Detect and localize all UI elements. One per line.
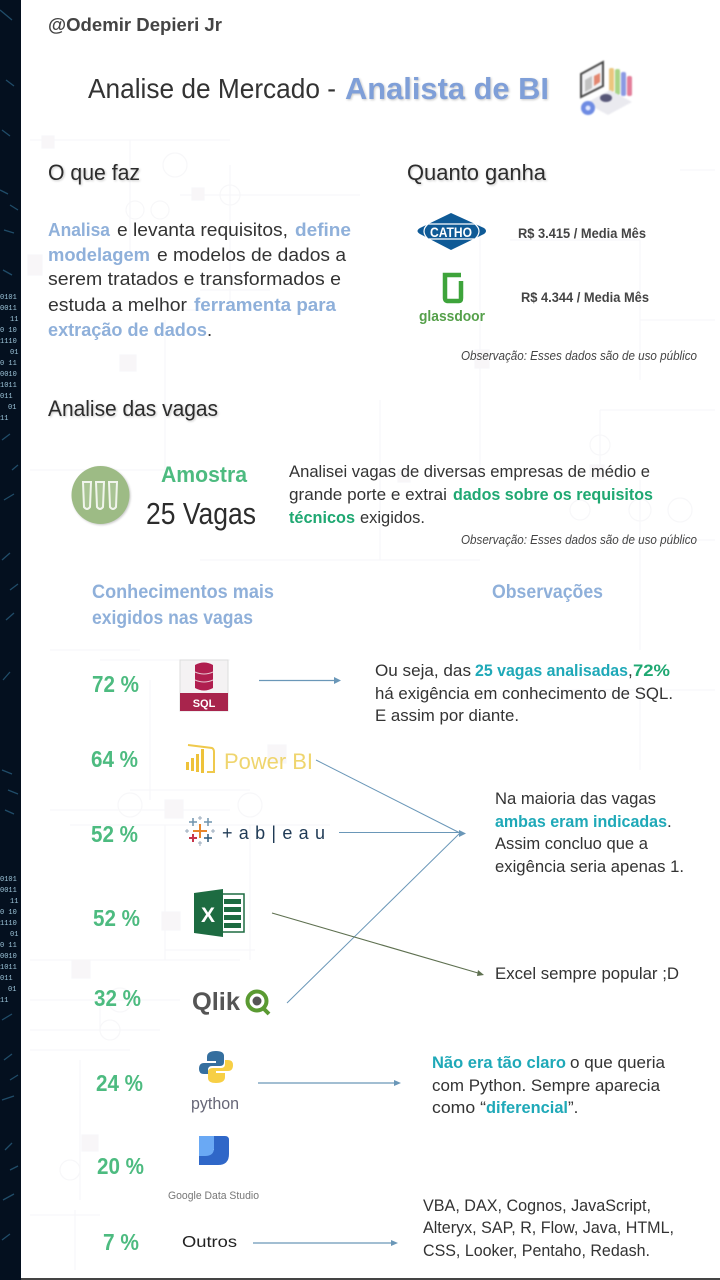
note: BI tools: ambas eram indicadas bbox=[495, 812, 667, 831]
dark side strip: 0 11 bbox=[0, 360, 17, 368]
logo: Tableau: + a b | e a u bbox=[222, 823, 325, 843]
sample description: Analisei vagas de diversas empresas de médio e bbox=[289, 462, 650, 481]
logo: Excel: X bbox=[201, 904, 215, 927]
description text: extração de dados bbox=[48, 319, 207, 340]
heading: Observações: Observações bbox=[492, 582, 603, 603]
dark side strip: 11 bbox=[10, 898, 18, 906]
percent Data Studio: 20 % bbox=[97, 1153, 144, 1179]
dark side strip: 0101 bbox=[0, 876, 17, 884]
note: Excel: Excel sempre popular ;D bbox=[495, 964, 679, 983]
note: Python: ”. bbox=[568, 1098, 578, 1117]
note: SQL: E assim por diante. bbox=[375, 706, 519, 725]
sample description: técnicos bbox=[289, 508, 355, 527]
logo: Excel bbox=[194, 889, 244, 937]
salary: Glassdoor: R$ 4.344 / Media Mês bbox=[521, 290, 649, 305]
note: public data: Observação: Esses dados são de uso público bbox=[461, 533, 697, 547]
arrow: SQL bbox=[259, 677, 341, 684]
heading: most required skills bbox=[92, 582, 274, 629]
icon: SQL: SQL bbox=[193, 698, 216, 710]
logo: Python bbox=[191, 1051, 239, 1113]
title: Analise de Mercado - bbox=[88, 73, 336, 104]
arrow: Outros bbox=[253, 1240, 398, 1246]
logo: Power BI: Power BI bbox=[224, 749, 313, 774]
logo: Glassdoor bbox=[419, 275, 485, 325]
logo: Catho bbox=[418, 213, 486, 250]
arrow: Python bbox=[258, 1080, 401, 1086]
note: Python: como “ bbox=[432, 1098, 486, 1117]
logo: Qlik: Qlik bbox=[192, 988, 240, 1016]
description text: modelagem bbox=[48, 244, 150, 265]
logo: Catho: CATHO bbox=[430, 224, 472, 240]
heading: Analise das vagas: Analise das vagas bbox=[48, 396, 218, 421]
note: Python: Não era tão claro bbox=[432, 1053, 566, 1072]
title: Analista de BI bbox=[345, 71, 549, 106]
description text: Analisa bbox=[48, 219, 111, 240]
sample description: grande porte e extrai bbox=[289, 485, 447, 504]
dark side strip: 1011 bbox=[0, 382, 17, 390]
dark side strip: 0010 bbox=[0, 371, 17, 379]
note: SQL bbox=[375, 661, 673, 725]
dark side strip: 1011 bbox=[0, 964, 17, 972]
percent SQL: 72 % bbox=[92, 671, 139, 697]
description text: define bbox=[295, 219, 351, 240]
note: other tools: CSS, Looker, Pentaho, Redash. bbox=[423, 1241, 650, 1260]
note: Python: o que queria bbox=[570, 1053, 666, 1072]
arrows: BI tools converge bbox=[287, 760, 466, 1003]
title bbox=[88, 71, 549, 106]
icon: analytics illustration bbox=[581, 62, 632, 115]
dark side strip: 0101 bbox=[0, 294, 17, 302]
dark side strip: 1110 bbox=[0, 338, 17, 346]
dark side strip: 11 bbox=[0, 997, 8, 1005]
note: BI tools bbox=[495, 789, 684, 876]
icon: SQL bbox=[180, 660, 228, 711]
dark side strip: 0011 bbox=[0, 305, 17, 313]
percent Power BI: 64 % bbox=[91, 746, 138, 772]
dark side strip: 01 bbox=[8, 404, 16, 412]
percent Outros: 7 % bbox=[103, 1229, 139, 1255]
note: BI tools: exigência seria apenas 1. bbox=[495, 857, 684, 876]
note: other tools: Alteryx, SAP, R, Flow, Java, HTML, bbox=[423, 1218, 674, 1237]
heading: most required skills: Conhecimentos mais bbox=[92, 582, 274, 603]
note: public data: Observação: Esses dados são de uso público bbox=[461, 349, 697, 363]
label: Amostra: Amostra bbox=[161, 462, 248, 487]
salary: Catho: R$ 3.415 / Media Mês bbox=[518, 226, 646, 241]
author handle: @Odemir Depieri Jr bbox=[48, 14, 222, 35]
percent Python: 24 % bbox=[96, 1070, 143, 1096]
logo: Power BI bbox=[186, 745, 313, 774]
dark side strip: 011 bbox=[0, 393, 13, 401]
dark side strip: 0 11 bbox=[0, 942, 17, 950]
sample size: 25 Vagas bbox=[146, 496, 256, 531]
description text: e levanta requisitos, bbox=[117, 219, 288, 240]
note: other tools: VBA, DAX, Cognos, JavaScript, bbox=[423, 1196, 651, 1215]
logo: Tableau bbox=[185, 816, 325, 846]
description text bbox=[48, 219, 351, 340]
dark side strip: 01 bbox=[10, 349, 18, 357]
percent Qlik: 32 % bbox=[94, 985, 141, 1011]
heading: Quanto ganha: Quanto ganha bbox=[407, 160, 546, 185]
icon: test tubes bbox=[72, 466, 130, 524]
heading: O que faz: O que faz bbox=[48, 160, 140, 185]
dark side strip: 11 bbox=[10, 316, 18, 324]
logo: Google Data Studio bbox=[168, 1136, 259, 1202]
logo: Google Data Studio: Google Data Studio bbox=[168, 1190, 259, 1202]
dark side strip: 0011 bbox=[0, 887, 17, 895]
logo: Qlik bbox=[192, 988, 269, 1016]
note: SQL: , bbox=[628, 661, 633, 680]
dark side strip: 011 bbox=[0, 975, 13, 983]
percent Tableau: 52 % bbox=[91, 821, 138, 847]
description text: serem tratados e transformados e bbox=[48, 268, 341, 289]
note: Python: diferencial bbox=[486, 1098, 568, 1117]
dark side strip: 1110 bbox=[0, 920, 17, 928]
description text: estuda a melhor bbox=[48, 294, 187, 315]
dark side strip: 01 bbox=[8, 986, 16, 994]
percent Excel: 52 % bbox=[93, 905, 140, 931]
note: other tools bbox=[423, 1196, 674, 1260]
description text: e modelos de dados a bbox=[157, 244, 347, 265]
note: BI tools: Na maioria das vagas bbox=[495, 789, 656, 808]
note: SQL: há exigência em conhecimento de SQL. bbox=[375, 684, 673, 703]
note: SQL: 72% bbox=[633, 661, 670, 680]
sample description: dados sobre os requisitos bbox=[453, 485, 653, 504]
sample description bbox=[289, 462, 653, 527]
label: Outros: Outros bbox=[182, 1234, 237, 1251]
note: Python: com Python. Sempre aparecia bbox=[432, 1076, 661, 1095]
dark side strip bbox=[0, 0, 21, 1280]
heading: most required skills: exigidos nas vagas bbox=[92, 608, 253, 629]
note: BI tools: Assim concluo que a bbox=[495, 834, 649, 853]
note: SQL: 25 vagas analisadas bbox=[475, 661, 628, 680]
note: Python bbox=[432, 1053, 666, 1117]
dark side strip: 11 bbox=[0, 415, 8, 423]
arrow: Excel bbox=[272, 913, 484, 976]
dark side strip: 01 bbox=[10, 931, 18, 939]
dark side strip: 0010 bbox=[0, 953, 17, 961]
dark side strip: 0 10 bbox=[0, 327, 17, 335]
note: BI tools: . bbox=[667, 812, 672, 831]
sample description: exigidos. bbox=[360, 508, 425, 527]
description text: . bbox=[207, 319, 212, 340]
dark side strip: 0 10 bbox=[0, 909, 17, 917]
logo: Python: python bbox=[191, 1094, 239, 1113]
description text: ferramenta para bbox=[194, 294, 337, 315]
note: SQL: Ou seja, das bbox=[375, 661, 471, 680]
logo: Glassdoor: glassdoor bbox=[419, 309, 485, 325]
